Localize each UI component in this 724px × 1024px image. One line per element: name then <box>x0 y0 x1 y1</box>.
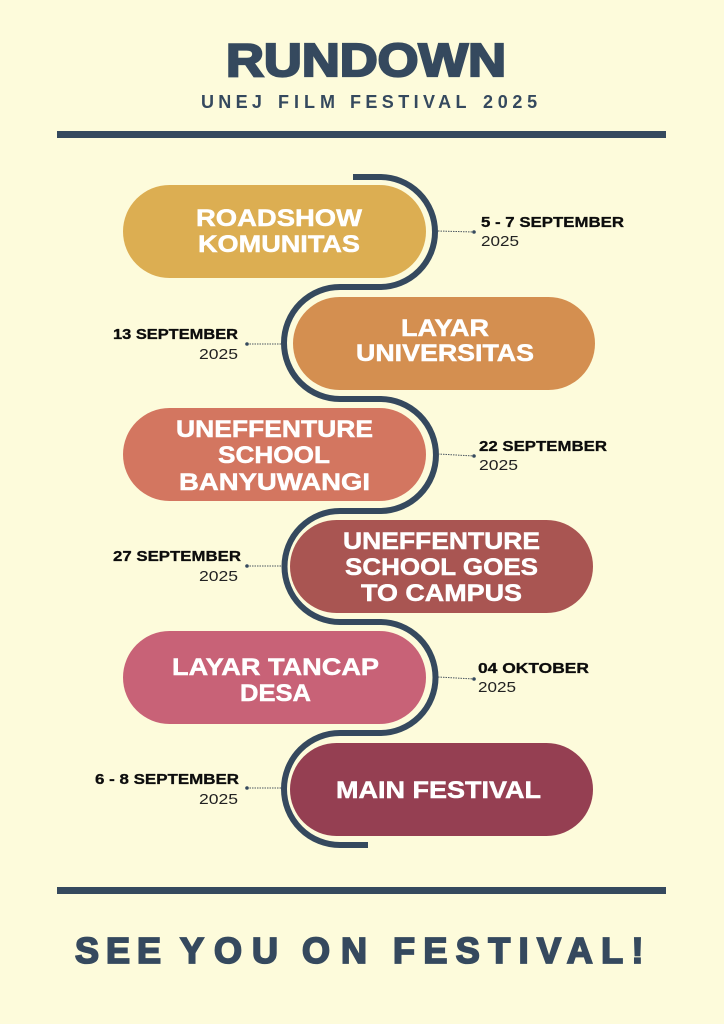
step 3: Uneffenture School Banyuwangi: UNEFFENTURE <box>176 416 373 443</box>
step 1: Roadshow Komunitas <box>123 185 426 278</box>
step 5: Layar Tancap Desa: LAYAR TANCAP <box>172 654 379 681</box>
step 1 date: 2025 <box>481 233 519 250</box>
step 2: Layar Universitas <box>293 297 595 390</box>
step 1: Roadshow Komunitas: ROADSHOW <box>196 205 362 232</box>
step 6 date: 2025 <box>199 791 238 808</box>
subtitle: 2025 <box>483 92 542 112</box>
bottom divider <box>57 887 666 894</box>
step 4 date <box>113 548 281 585</box>
step 3: Uneffenture School Banyuwangi <box>123 408 426 501</box>
step 6 date: 6 - 8 SEPTEMBER <box>95 771 239 788</box>
step 4 date: 2025 <box>199 568 238 585</box>
step 5: Layar Tancap Desa: DESA <box>240 680 311 707</box>
step 3 date: 2025 <box>479 457 518 474</box>
step 6: Main Festival <box>290 743 593 836</box>
step 5 date: 04 OKTOBER <box>478 660 589 677</box>
winding timeline path <box>284 177 436 845</box>
step 4 date: 27 SEPTEMBER <box>113 548 241 565</box>
footer message: SEE <box>75 930 168 971</box>
step 4: Uneffenture School Goes to Campus: TO CAMPUS <box>361 580 522 607</box>
step 2: Layar Universitas: UNIVERSITAS <box>356 340 534 367</box>
footer message: YOU <box>180 930 288 971</box>
step 3: Uneffenture School Banyuwangi: BANYUWANGI <box>179 469 370 496</box>
footer message: ON <box>302 930 378 971</box>
step 4: Uneffenture School Goes to Campus: SCHOOL GOES <box>345 554 538 581</box>
title: RUNDOWN <box>226 34 506 86</box>
step 3: Uneffenture School Banyuwangi: SCHOOL <box>218 442 330 469</box>
step 2 date: 13 SEPTEMBER <box>113 326 238 343</box>
top divider <box>57 131 666 138</box>
step 6: Main Festival: MAIN FESTIVAL <box>336 777 541 804</box>
subtitle: FESTIVAL <box>350 92 471 112</box>
step 5 date: 2025 <box>478 679 516 696</box>
footer message <box>75 930 652 971</box>
step 6 date <box>95 771 281 808</box>
subtitle: FILM <box>278 92 340 112</box>
footer message: FESTIVAL! <box>393 930 652 971</box>
step 2: Layar Universitas: LAYAR <box>401 315 489 342</box>
subtitle: UNEJ <box>201 92 266 112</box>
subtitle <box>201 92 542 112</box>
step 2 date: 2025 <box>199 346 238 363</box>
step 5 date <box>438 660 589 696</box>
step 4: Uneffenture School Goes to Campus: UNEFFENTURE <box>343 528 540 555</box>
step 2 date <box>113 326 281 363</box>
step 1 date: 5 - 7 SEPTEMBER <box>481 214 624 231</box>
step 1: Roadshow Komunitas: KOMUNITAS <box>198 231 360 258</box>
step 5: Layar Tancap Desa <box>123 631 426 724</box>
step 4: Uneffenture School Goes to Campus <box>290 520 593 613</box>
step 3 date: 22 SEPTEMBER <box>479 438 607 455</box>
step 1 date <box>438 214 624 250</box>
step 3 date <box>438 438 607 474</box>
